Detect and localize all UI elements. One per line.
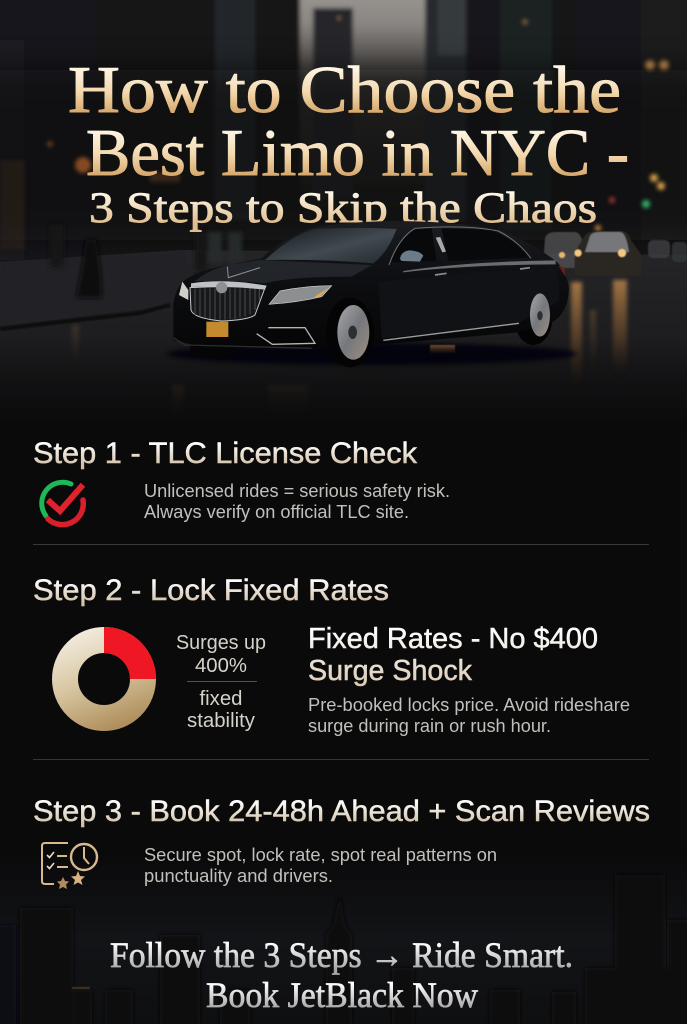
step 2 heading: Step 2 - Lock Fixed Rates [33,574,389,607]
step 1 heading: Step 1 - TLC License Check [33,437,418,470]
wet road reflections [72,280,627,420]
hood ornament lines [227,267,260,278]
licence plate [206,322,228,337]
panel: step 3 [33,795,650,889]
donut labels: Surges up [176,632,266,654]
under-car amber reflection [430,345,455,354]
step 3 heading: Step 3 - Book 24-48h Ahead + Scan Reviews [33,795,650,828]
donut labels: stability [187,710,255,732]
divider [33,759,649,760]
dark veil behind title [0,70,687,240]
car shadow [167,343,577,365]
front wheel [326,297,374,367]
panel: step 1 [33,437,450,525]
fade to black [0,340,687,435]
rear wheel [530,293,550,337]
title: Best Limo in NYC - [86,116,629,190]
step 1 description [144,481,450,522]
callout heading: Fixed Rates - No $400 [308,623,598,655]
grille [190,281,267,321]
title [68,53,629,232]
city lights [0,16,669,250]
callout description [308,695,630,736]
callout heading: Surge Shock [308,655,472,687]
background photo: blurred NYC street [0,0,687,435]
donut labels: 400% [195,655,247,677]
window pillar highlight [436,237,446,252]
hood reflection [195,260,372,283]
road and sidewalk [0,250,687,420]
panel: step 2 [33,574,630,736]
door shading [378,268,559,338]
far front tire [190,339,237,358]
window trim [389,227,531,265]
title: How to Choose the [68,53,621,127]
mirror [400,250,423,262]
distant cars [543,231,687,276]
icon: checklist, clock and stars [42,843,97,889]
left headlight [179,282,188,300]
side sill chrome [383,323,519,340]
donut labels: fixed [200,688,242,710]
step 3 description: punctuality and drivers. [144,866,333,886]
call to action: Follow the 3 Steps → Ride Smart. [110,935,573,975]
belt line [403,260,556,272]
donut chart [65,627,156,718]
callout heading [308,623,598,687]
city skyline at the bottom [0,850,687,1024]
windshield [265,228,397,263]
callout description: surge during rain or rush hour. [308,716,551,736]
tail light [558,266,566,277]
car body [173,221,569,350]
door handles [435,268,530,275]
call to action: Book JetBlack Now [206,975,478,1015]
lower bumper vent [257,328,315,344]
step 3 description [144,845,497,886]
main headlight [269,286,332,304]
rear tire [514,288,553,345]
pedestrians [50,225,242,272]
step 3 description: Secure spot, lock rate, spot real patterns on [144,845,497,865]
callout description: Pre-booked locks price. Avoid rideshare [308,695,630,715]
donut labels [176,632,266,732]
limousine photo illustration [173,221,569,367]
title: 3 Steps to Skip the Chaos [89,185,597,232]
lower lip [173,338,312,348]
step 1 description: Unlicensed rides = serious safety risk. [144,481,450,501]
divider [33,544,649,545]
icon: check mark in circle [42,482,83,525]
curb [0,305,170,329]
step 1 description: Always verify on official TLC site. [144,502,409,522]
street lamp post [76,240,102,298]
call to action [110,935,573,1015]
side windows [392,228,528,262]
